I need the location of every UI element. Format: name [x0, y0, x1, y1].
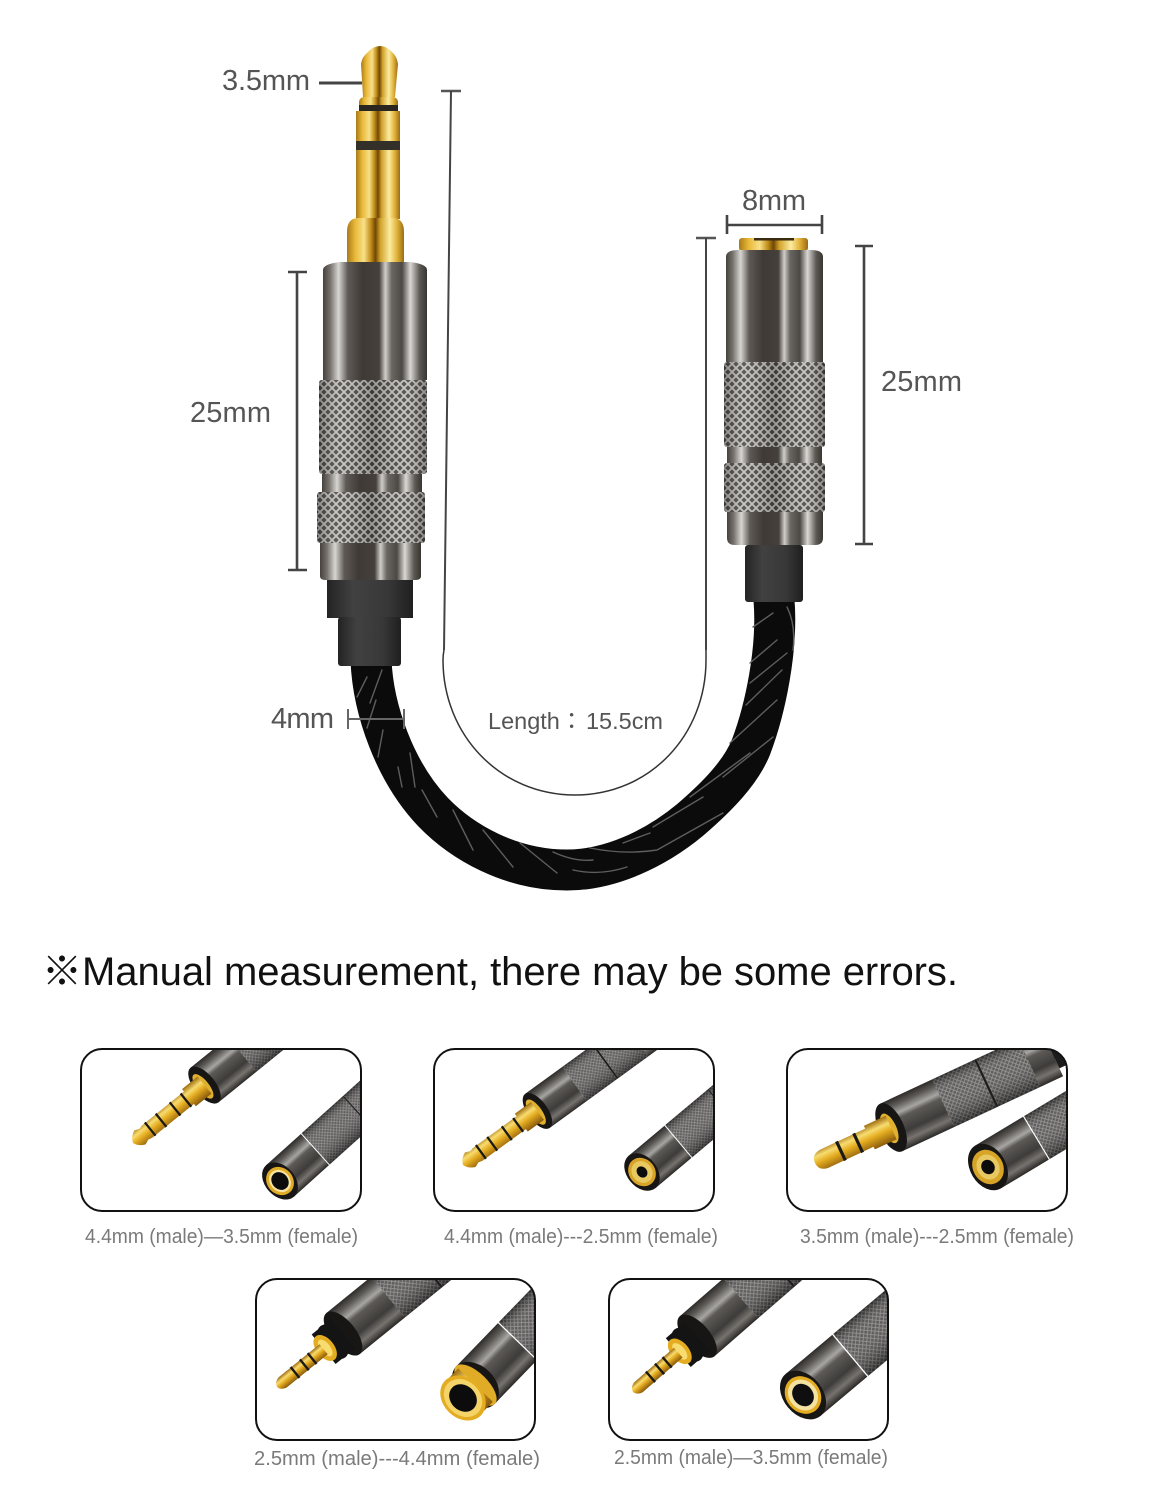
right 3.5mm female jack	[724, 238, 825, 602]
dimension: overall length curve	[441, 91, 716, 795]
caption: 2.5mm male to 3.5mm female: 2.5mm (male)—3.5mm (female)	[614, 1447, 888, 1469]
left 3.5mm plug	[317, 46, 427, 666]
cable: braided black lead	[357, 600, 794, 873]
dimension: 8mm jack width: 8mm	[742, 185, 806, 217]
dimension: 3.5mm tip	[222, 65, 362, 97]
metal barrel and knurled grips	[317, 262, 427, 580]
caption: 3.5mm male to 2.5mm female: 3.5mm (male)---2.5mm (female)	[800, 1226, 1074, 1248]
dimension: 25mm jack barrel: 25mm	[881, 366, 962, 398]
dimension: 4mm cable width	[271, 703, 404, 735]
gold tip and shaft	[347, 46, 404, 262]
caption: 2.5mm male to 4.4mm female: 2.5mm (male)---4.4mm (female)	[254, 1448, 540, 1470]
panel: 2.5mm male to 3.5mm female	[608, 1278, 889, 1441]
note: manual measurement: Manual measurement, there may be some errors.	[82, 950, 958, 994]
dimension: 25mm jack barrel	[855, 246, 962, 544]
dimension: 4mm cable width: 4mm	[271, 703, 334, 735]
panel: 4.4mm male to 3.5mm female	[80, 1048, 362, 1212]
panel: 3.5mm male to 2.5mm female	[786, 1048, 1068, 1212]
dimension: overall length curve: 15.5cm	[586, 708, 663, 734]
dimension: 25mm plug barrel: 25mm	[190, 397, 271, 429]
dimension: 3.5mm tip: 3.5mm	[222, 65, 310, 97]
note: manual measurement: ※	[42, 950, 82, 994]
dimension: 25mm plug barrel	[190, 272, 307, 570]
caption: 4.4mm male to 2.5mm female: 4.4mm (male)---2.5mm (female)	[444, 1226, 718, 1248]
dimension: 8mm jack width	[727, 185, 822, 234]
dimension: overall length curve: Length：	[488, 708, 583, 734]
panel: 2.5mm male to 4.4mm female	[255, 1278, 536, 1441]
rubber strain relief	[327, 580, 413, 666]
panel: 4.4mm male to 2.5mm female	[433, 1048, 715, 1212]
caption: 4.4mm male to 3.5mm female: 4.4mm (male)—3.5mm (female)	[85, 1226, 358, 1248]
